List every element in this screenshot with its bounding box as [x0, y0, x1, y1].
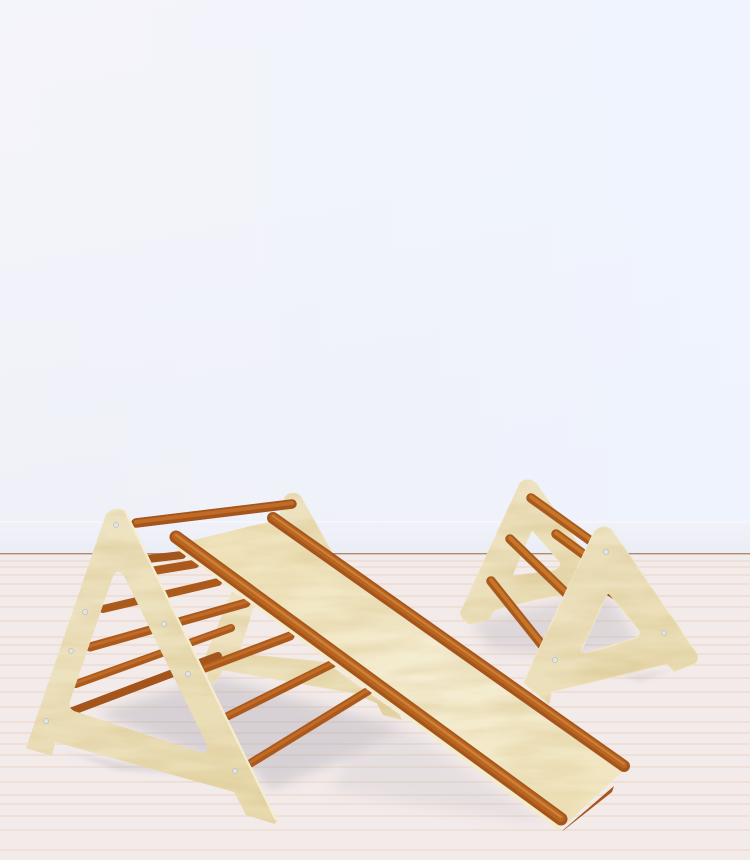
baseboard: [0, 521, 750, 553]
slide: cream side edge: [178, 544, 561, 826]
large triangle: rungs: [70, 503, 368, 763]
slide: dark underside at the lower end: [562, 786, 614, 831]
small triangle: front frame: [523, 527, 698, 704]
floor: [0, 553, 750, 860]
small triangle: rungs: [491, 497, 620, 650]
slide: far rail: [273, 516, 624, 766]
large triangle: lit edge and screws: [43, 511, 276, 820]
slide: board surface: [190, 522, 622, 824]
wall: [0, 0, 750, 554]
large triangle: rear frame: [206, 493, 402, 720]
slide: [176, 516, 624, 831]
large triangle: front frame: [26, 509, 277, 824]
floor shadows: [53, 596, 672, 825]
small triangle: rear frame: [460, 480, 610, 624]
slide: near rail: [176, 535, 561, 819]
small triangle: screws: [552, 549, 667, 663]
